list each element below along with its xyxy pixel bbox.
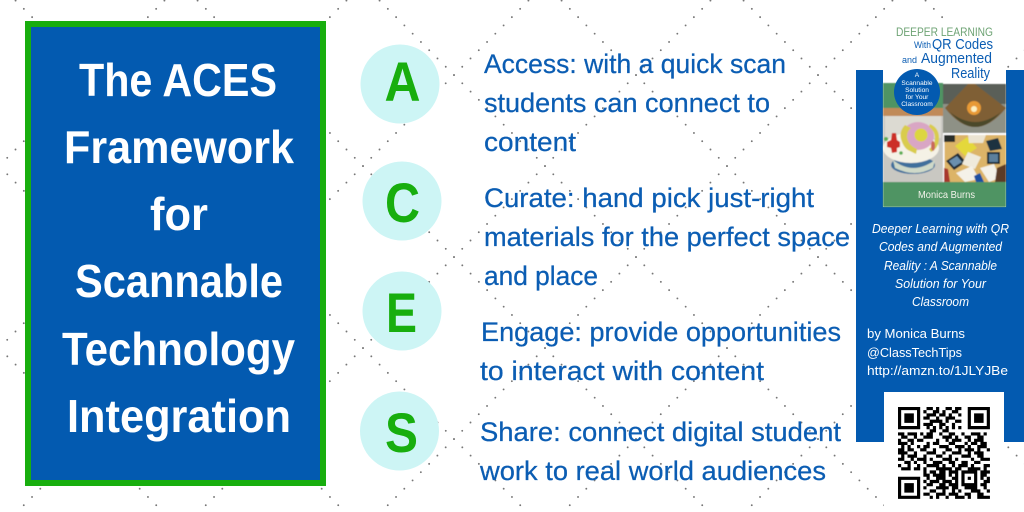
QR code xyxy=(884,392,1004,512)
access text: students can connect to xyxy=(484,88,770,118)
book description: Deeper Learning with QR xyxy=(872,221,1009,236)
curate text: Curate: hand pick just-right xyxy=(484,183,815,213)
book cover xyxy=(883,22,1006,207)
letter circle S: S xyxy=(385,401,418,464)
book description: Classroom xyxy=(912,294,969,309)
curate text xyxy=(484,183,850,291)
letter circle E xyxy=(362,272,442,350)
cover badge: for Your xyxy=(906,94,929,101)
book description: Solution for Your xyxy=(895,276,987,291)
engage text: Engage: provide opportunities xyxy=(481,317,841,347)
curate text: materials for the perfect space xyxy=(484,222,850,252)
engage text: to interact with content xyxy=(480,356,765,386)
letter circle S xyxy=(360,392,439,470)
cover badge: Scannable xyxy=(901,80,933,87)
letter circle C xyxy=(362,162,442,240)
cover badge: A xyxy=(915,72,920,79)
cover title: Augmented xyxy=(921,50,992,67)
title text: Framework xyxy=(64,121,294,173)
cover badge xyxy=(894,69,940,115)
title text: for xyxy=(150,188,208,240)
book description: Reality : A Scannable xyxy=(884,258,997,273)
access text: content xyxy=(484,127,577,157)
title text: Scannable xyxy=(75,255,283,307)
letter circle A xyxy=(360,44,440,124)
sidebar panel xyxy=(856,70,1024,442)
title text xyxy=(62,54,295,442)
book description xyxy=(872,221,1009,309)
cover title: and xyxy=(902,55,917,65)
author and link xyxy=(867,326,1008,378)
title text: Integration xyxy=(67,390,291,442)
author and link: http://amzn.to/1JLYJBe xyxy=(867,363,1008,378)
cover title xyxy=(896,25,993,82)
share text xyxy=(479,417,842,486)
share text: Share: connect digital student xyxy=(480,417,842,447)
access text xyxy=(484,49,786,157)
title text: The ACES xyxy=(79,54,277,106)
cover title: QR Codes xyxy=(932,36,993,53)
cover photos xyxy=(883,83,1006,207)
letter circle E: E xyxy=(386,281,417,344)
cover author: Monica Burns xyxy=(918,189,975,201)
share text: work to real world audiences xyxy=(479,456,826,486)
author and link: @ClassTechTips xyxy=(867,345,962,360)
letter circle C: C xyxy=(385,171,420,234)
cover badge: Classroom xyxy=(901,101,933,108)
book description: Codes and Augmented xyxy=(879,239,1003,254)
cover badge: Solution xyxy=(905,87,929,94)
cover title: Reality xyxy=(951,65,990,82)
cover title: With xyxy=(914,40,931,50)
author and link: by Monica Burns xyxy=(867,326,965,341)
engage text xyxy=(480,317,841,386)
curate text: and place xyxy=(484,261,598,291)
title panel xyxy=(28,24,323,483)
letter circle A: A xyxy=(384,50,420,113)
cover title: DEEPER LEARNING xyxy=(896,25,993,39)
access text: Access: with a quick scan xyxy=(484,49,786,79)
title text: Technology xyxy=(62,323,295,375)
